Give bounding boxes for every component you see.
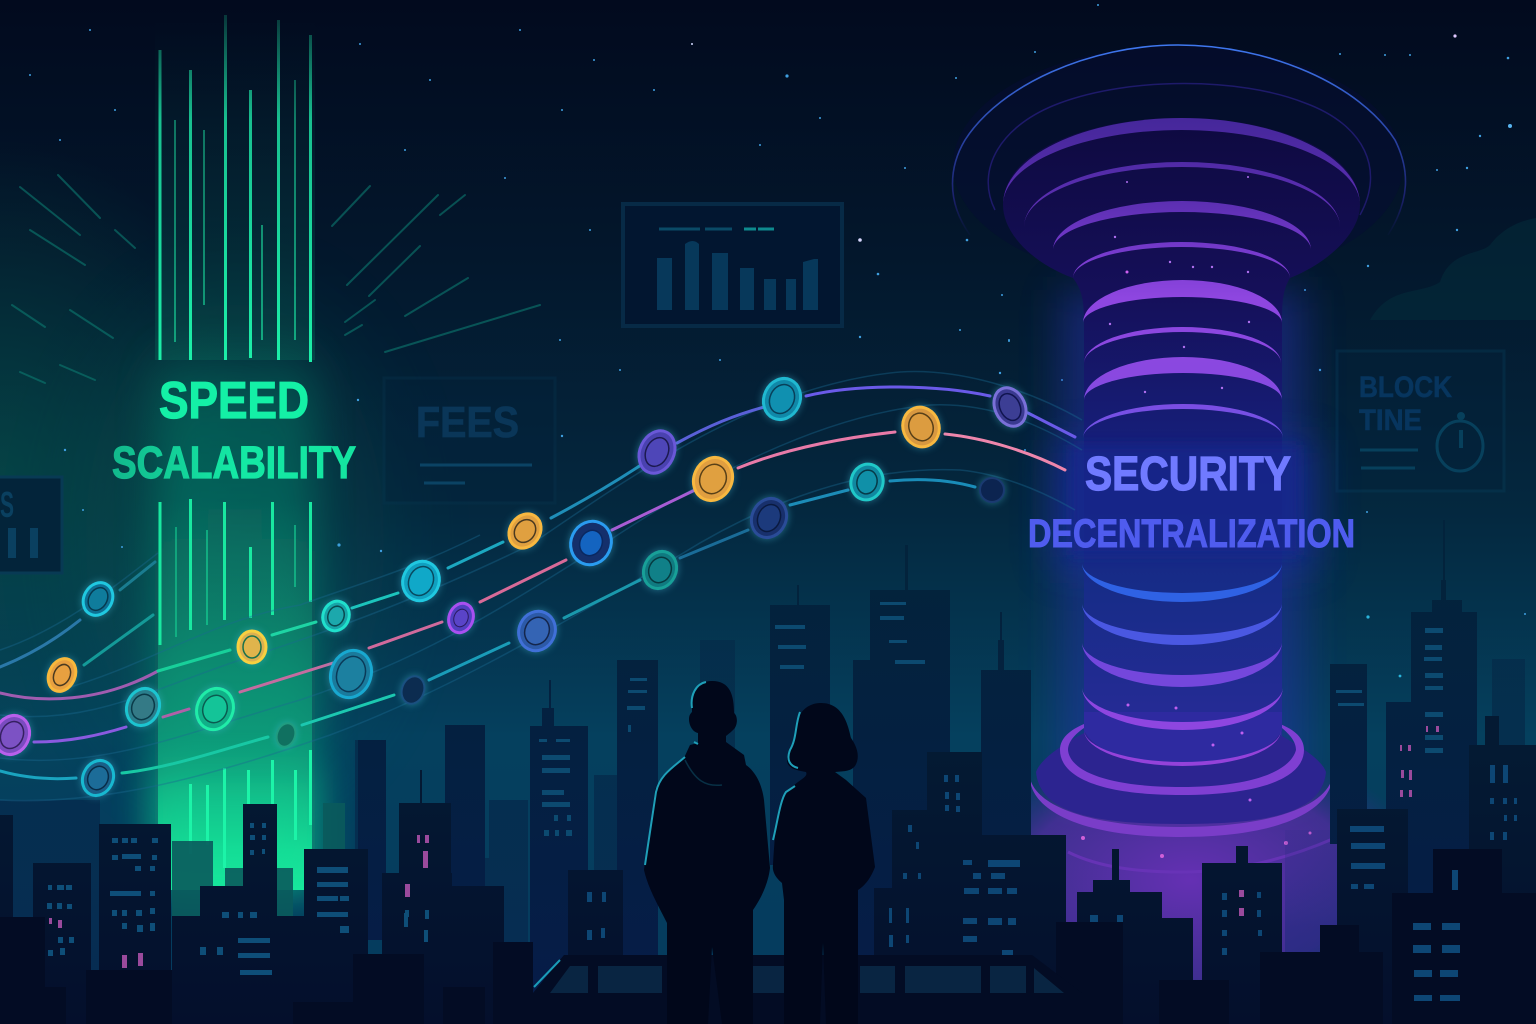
heading: scalability: SCALABILITY [112, 437, 356, 488]
coin: purple left edge [0, 710, 36, 760]
coin stream: faint wave lines [0, 372, 1082, 801]
coin: large blue teal [324, 645, 378, 703]
background city layer [0, 640, 1525, 1024]
tower glow [1060, 290, 1305, 800]
ghost panel: left partial [0, 477, 62, 573]
top rings [1003, 118, 1360, 438]
coin: violet far right [988, 383, 1032, 431]
coin: dim navy [398, 673, 428, 707]
midground city layer [358, 520, 1477, 1006]
block time label: TINE [1359, 404, 1422, 437]
coin: teal middle [637, 546, 683, 594]
panel letter: S [0, 484, 14, 525]
cloud silhouette [1370, 218, 1536, 320]
heading: security: SECURITY [1085, 448, 1291, 501]
coin: cyan upper left [77, 577, 119, 621]
midground windows [539, 602, 1443, 836]
coin: orange left [43, 654, 81, 696]
coin: violet small [445, 600, 477, 636]
ghost panel: block time [1337, 351, 1504, 491]
coin: teal small [319, 597, 353, 635]
speed burst lines [12, 175, 540, 383]
coin: teal right [847, 460, 887, 504]
coin stream: track 3 [34, 432, 1065, 742]
middle light streaks [158, 499, 312, 645]
green speed beam [150, 15, 320, 890]
teal buildings near beam [172, 803, 345, 1024]
heading: decentralization: DECENTRALIZATION [1028, 512, 1355, 556]
outer saucer rings [952, 45, 1405, 235]
coin: dim green [273, 721, 299, 749]
coin: blue [512, 605, 562, 657]
coin: orange right [897, 402, 945, 452]
coin: bright cyan [396, 555, 446, 607]
beam glow [155, 340, 315, 890]
coin: yellow [238, 631, 266, 663]
coin: dim far right [980, 478, 1004, 502]
saucer shadow [953, 46, 1403, 284]
coin stream: track 2 [0, 387, 1075, 699]
lower rings [1082, 563, 1282, 602]
fees label: FEES [416, 398, 519, 447]
coin: green [190, 683, 240, 735]
coin: bright blue [564, 515, 618, 571]
coin: dim blue [745, 493, 793, 543]
violet-tinted buildings near tower [1285, 830, 1395, 1024]
chart bars [657, 241, 818, 310]
beam column [158, 500, 312, 890]
coin: indigo [632, 425, 682, 479]
column fade behind labels [1070, 445, 1300, 555]
coin: cyan top [757, 372, 807, 426]
rooftop railing [533, 955, 1104, 1024]
beam upper haze [155, 20, 315, 360]
ghost panel: bar chart [623, 204, 842, 326]
ghost panel: fees [384, 378, 555, 503]
coins [0, 372, 1032, 801]
stopwatch icon [1437, 414, 1483, 471]
decentralized tower [950, 45, 1430, 1020]
nearest block row [0, 849, 1536, 1024]
tower sparkles [1081, 176, 1312, 858]
coin: teal grey [120, 683, 166, 731]
heading: speed: SPEED [159, 372, 309, 430]
coin: orange upper [686, 451, 740, 507]
stars [29, 4, 1526, 677]
person: woman silhouette [773, 703, 875, 1024]
base rings [1030, 712, 1335, 872]
coin stream: track 4 [0, 480, 975, 779]
block time label: BLOCK [1359, 371, 1452, 404]
funnel body [1003, 118, 1360, 770]
coin: orange middle [502, 508, 548, 554]
coin stream: track 1 [0, 562, 155, 667]
upper light streaks [158, 15, 312, 362]
foreground windows [47, 823, 429, 975]
coin: cyan lower left [77, 755, 119, 801]
purple base glow [950, 740, 1430, 1020]
coin: yellow inner [243, 636, 261, 658]
person: man silhouette [644, 681, 770, 1024]
lower light streaks [189, 750, 312, 868]
foreground city layer [0, 716, 1536, 1024]
